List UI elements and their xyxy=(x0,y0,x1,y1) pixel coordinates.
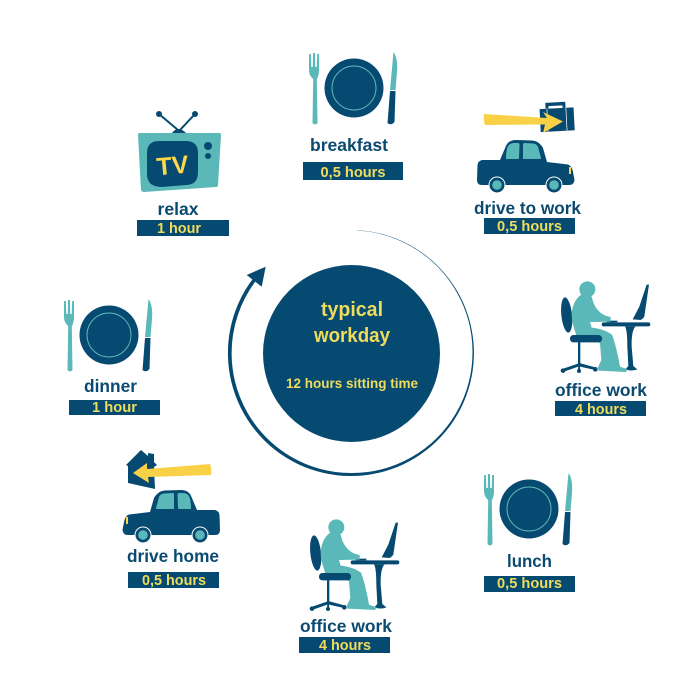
panel: dinner xyxy=(64,299,160,416)
duration bar: 4 hours xyxy=(575,401,627,418)
panel: office work (right) xyxy=(555,281,650,418)
icon: person at desk xyxy=(560,281,650,373)
duration bar: 0,5 hours xyxy=(497,218,562,235)
duration bar: 1 hour xyxy=(157,220,201,237)
icon: plate and cutlery xyxy=(484,473,572,546)
icon: plate and cutlery xyxy=(309,52,397,124)
panel: lunch xyxy=(484,473,575,592)
arrow: home xyxy=(133,463,211,483)
icon: plate and cutlery xyxy=(64,299,152,372)
duration bar: 0,5 hours xyxy=(142,572,206,589)
label: office work: office work xyxy=(555,380,647,400)
panel: drive to work xyxy=(474,101,581,235)
label: breakfast: breakfast xyxy=(310,135,388,155)
duration bar: 0,5 hours xyxy=(497,575,562,592)
center title: workday xyxy=(313,325,391,347)
center title: typical xyxy=(321,299,383,321)
label: lunch: lunch xyxy=(507,551,552,571)
duration bar: 0,5 hours xyxy=(320,164,386,181)
label: drive home: drive home xyxy=(127,546,219,566)
panel: drive home xyxy=(122,450,220,589)
icon: person at desk xyxy=(309,519,399,611)
panel: relax xyxy=(137,111,229,237)
icon: television: TV xyxy=(155,151,190,181)
circular arrow xyxy=(228,230,474,476)
icon: car xyxy=(477,140,574,194)
arrow: to work xyxy=(484,112,563,133)
sitting time total: 12 hours sitting time xyxy=(286,376,418,391)
label: drive to work: drive to work xyxy=(474,198,581,218)
label: dinner: dinner xyxy=(84,376,137,396)
duration bar: 4 hours xyxy=(319,637,371,654)
duration bar: 1 hour xyxy=(92,399,137,416)
label: relax: relax xyxy=(158,199,199,219)
center title xyxy=(313,299,391,347)
center circle xyxy=(263,265,440,442)
icon: car xyxy=(122,490,220,544)
panel: office work (bottom) xyxy=(299,519,399,654)
icon: briefcase xyxy=(539,101,575,132)
icon: house xyxy=(126,450,157,489)
panel: breakfast xyxy=(303,52,403,181)
label: office work: office work xyxy=(300,616,392,636)
